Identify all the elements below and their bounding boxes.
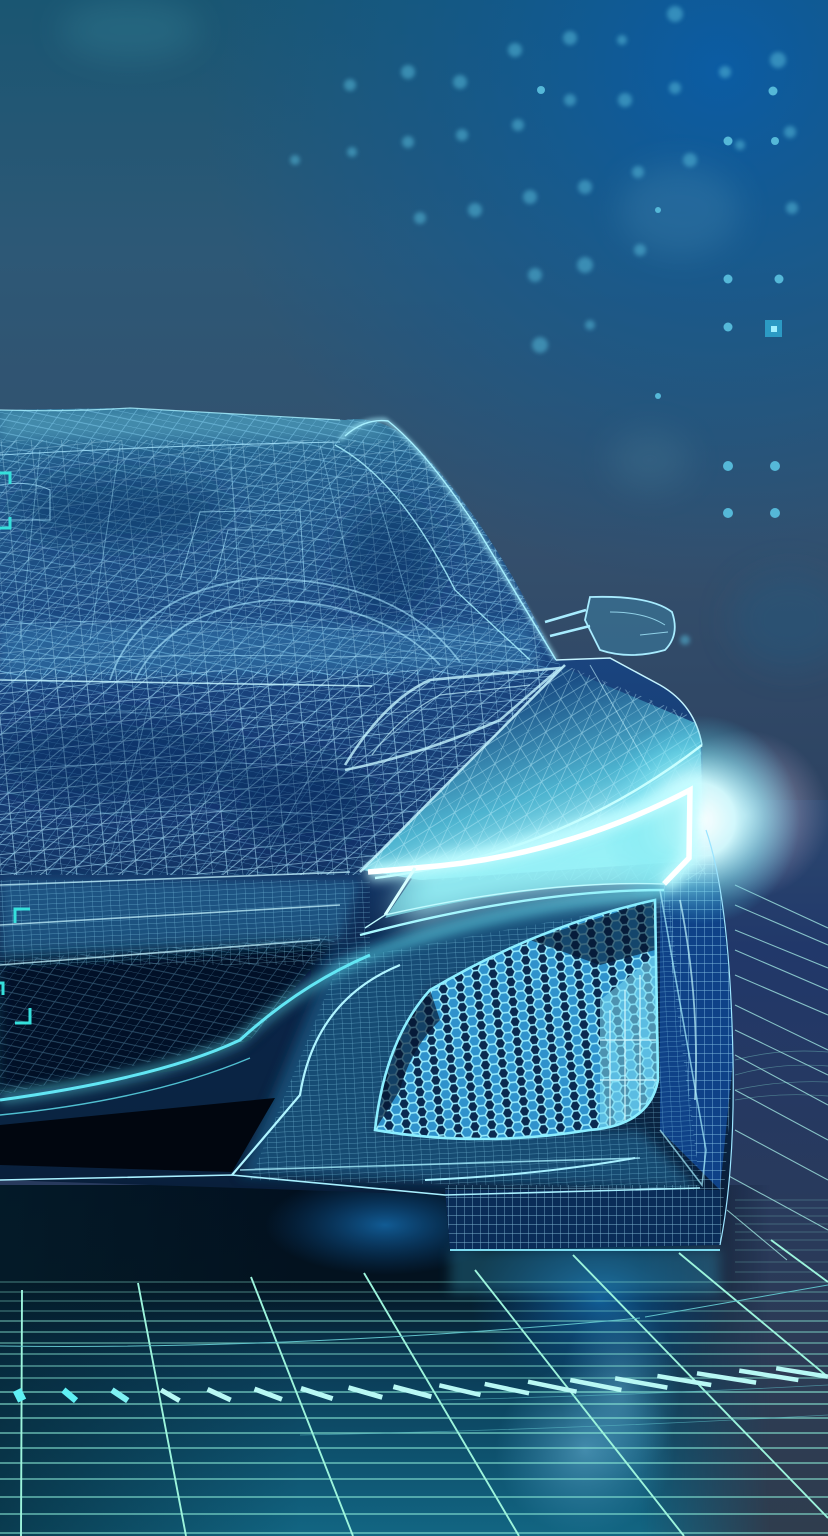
- bright body curves: [0, 830, 733, 1250]
- car body base: [0, 408, 733, 1250]
- hood crease lines: [0, 658, 702, 965]
- A-pillar and roof: [0, 408, 556, 660]
- windshield and cabin lines: [0, 442, 530, 860]
- headlight glow: [400, 715, 828, 925]
- wireframe mesh: [0, 405, 733, 1250]
- body tone regions: [0, 410, 733, 1250]
- floor dashes: [17, 1368, 828, 1401]
- floor grid: [0, 885, 828, 1536]
- cabin shadow patches: [0, 475, 440, 845]
- focus brackets: [0, 473, 30, 1023]
- headlight: [360, 745, 702, 935]
- air intake grille: [370, 895, 665, 1150]
- black lower bumper: [0, 1098, 275, 1172]
- side mirror: [545, 597, 675, 655]
- floating data dots: [290, 6, 798, 645]
- car: [0, 405, 828, 1250]
- floor: [0, 800, 828, 1536]
- background sky: [0, 0, 828, 1000]
